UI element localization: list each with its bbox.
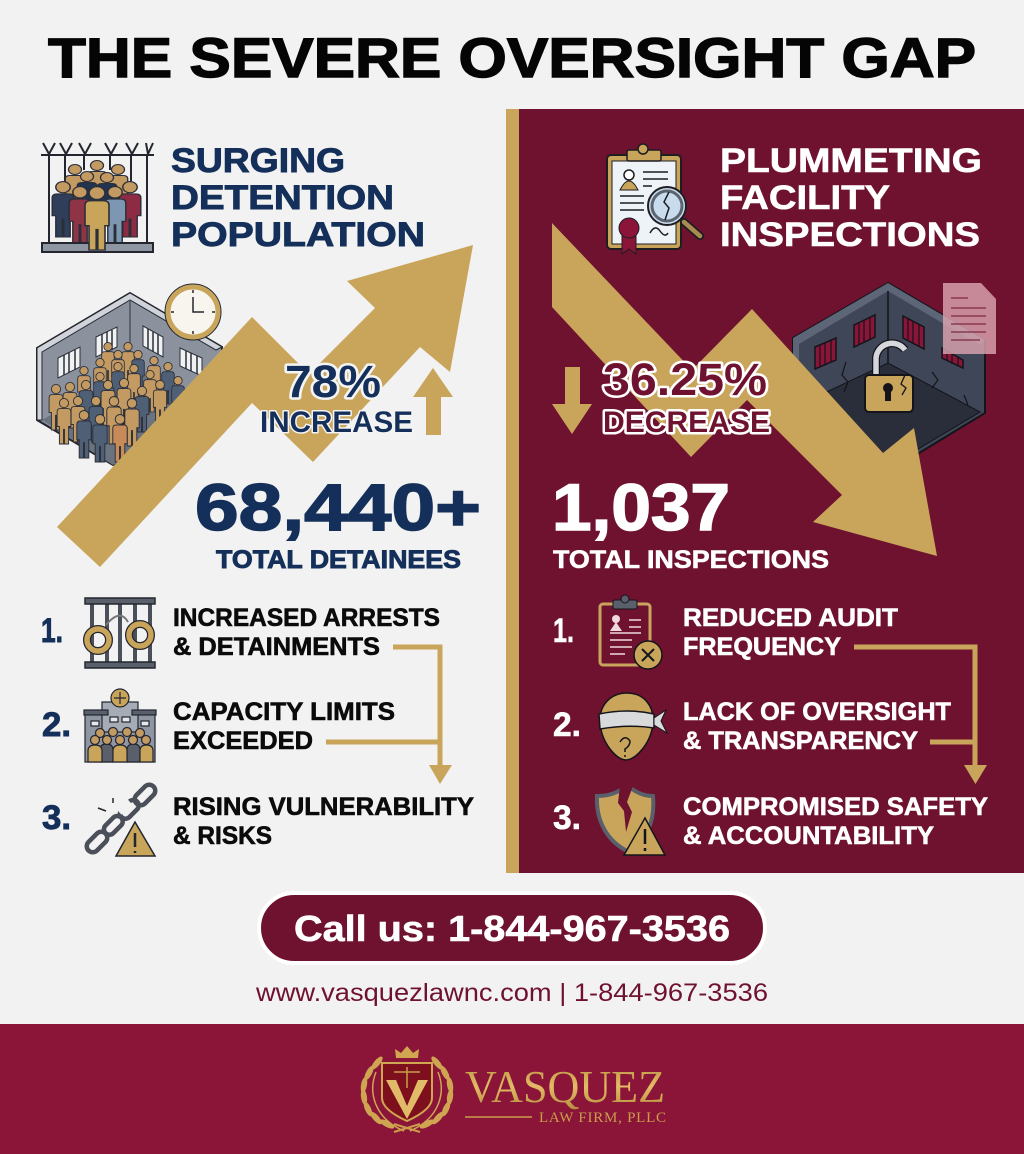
item 2: lack of oversight: 2. [553,706,581,744]
heading: plummeting facility inspections: PLUMMETING [720,142,982,180]
item 3: compromised safety [553,785,988,855]
item 3: rising vulnerability: 3. [42,799,71,837]
illustration: overcrowded cell with clock [37,284,222,465]
icon: small up arrow [413,368,453,435]
illustration: dark cell with broken padlock and document [793,283,996,475]
logo crest [360,1046,454,1132]
stat: total inspections [552,470,829,574]
item 2: capacity limits: EXCEEDED [173,727,313,755]
stat: total detainees: 68,440+ [195,470,481,544]
icon: small down arrow [552,367,592,434]
stat: total inspections: TOTAL INSPECTIONS [553,546,829,574]
item 1: increased arrests: INCREASED ARRESTS [173,604,440,632]
call to action button [259,893,765,963]
item 1: increased arrests [41,598,440,668]
stat: total detainees [195,470,481,574]
stat: 36.25% decrease: 36.25% [603,354,767,405]
stat: total inspections: 1,037 [552,470,730,544]
item 3: rising vulnerability: & RISKS [173,822,272,850]
item 3: compromised safety: COMPROMISED SAFETY [683,793,988,821]
item 3: compromised safety: & ACCOUNTABILITY [683,822,934,850]
heading: surging detention population [171,142,425,254]
arrow: right connector [854,647,987,784]
item 2: capacity limits [42,689,395,762]
item 2: capacity limits: 2. [42,706,71,744]
footer band [0,1024,1024,1154]
item 1: increased arrests: & DETAINMENTS [173,633,380,661]
arrow: falling trend [552,223,937,556]
item 2: lack of oversight: LACK OF OVERSIGHT [683,698,951,726]
item 3: rising vulnerability: RISING VULNERABILITY [173,793,474,821]
item 1: reduced audit: FREQUENCY [683,633,841,661]
title: THE SEVERE OVERSIGHT GAP [48,26,976,89]
logo: vasquez law firm [360,1046,666,1132]
heading: surging detention population: POPULATION [171,216,425,254]
heading: plummeting facility inspections: INSPECTIONS [720,216,980,254]
item 1: reduced audit: 1. [553,612,574,650]
arrow: left connector [326,647,452,784]
list: right consequences [553,595,988,855]
call to action button: Call us: 1-844-967-3536 [294,908,730,949]
stat: 78% increase [260,356,413,439]
arrow: rising trend [57,245,473,567]
logo: vasquez law firm: VASQUEZ [465,1061,665,1112]
item 2: lack of oversight: & TRANSPARENCY [683,727,918,755]
website and phone line: www.vasquezlawnc.com | 1-844-967-3536 [255,979,768,1007]
heading: surging detention population: DETENTION [171,179,394,217]
stat: 36.25% decrease [603,354,770,439]
item 1: reduced audit: REDUCED AUDIT [683,604,898,632]
stat: 36.25% decrease: DECREASE [603,406,770,439]
heading: plummeting facility inspections: FACILITY [720,179,890,217]
item 3: rising vulnerability [42,782,474,856]
stat: total detainees: TOTAL DETAINEES [216,546,461,574]
icon: clipboard inspection [607,144,700,254]
item 2: capacity limits: CAPACITY LIMITS [173,698,395,726]
item 1: reduced audit [553,595,898,669]
heading: plummeting facility inspections [720,142,982,254]
icon: crowd behind bars [41,143,154,252]
item 3: compromised safety: 3. [553,799,581,837]
item 1: increased arrests: 1. [41,612,63,650]
stat: 78% increase: 78% [285,356,381,407]
heading: surging detention population: SURGING [171,142,345,180]
panel: plummeting inspections background [506,109,1024,873]
list: left causes [41,598,474,856]
logo: vasquez law firm: LAW FIRM, PLLC [539,1110,666,1126]
stat: 78% increase: INCREASE [260,406,413,439]
item 2: lack of oversight [553,693,951,760]
